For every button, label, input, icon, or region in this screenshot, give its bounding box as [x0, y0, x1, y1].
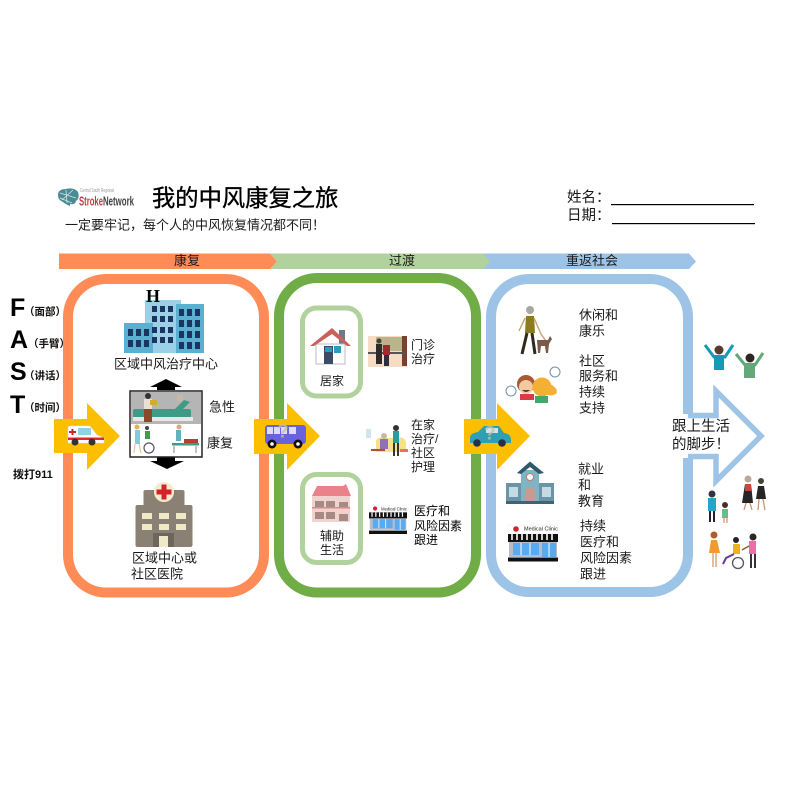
label: home care: 在家	[411, 417, 435, 432]
icon: car: ?	[484, 424, 496, 444]
label: medical and risk follow-up	[414, 504, 462, 547]
arrow: to community with car	[464, 403, 530, 470]
label: leisure and recreation	[579, 308, 618, 338]
band: 过渡	[270, 253, 490, 269]
call 911: 拨打911	[13, 467, 53, 481]
label: community services and support: 社区	[579, 354, 605, 368]
icon: medical clinic large: Medical Clinic	[524, 526, 558, 532]
label: continued medical and risk follow-up: 风险因素	[580, 550, 632, 566]
label: assisted living: 辅助	[320, 529, 344, 543]
label: outpatient	[411, 337, 435, 366]
icon: stroke centre building	[124, 286, 204, 353]
FAST mnemonic: （讲话）	[24, 369, 66, 382]
arrow: to hospital with ambulance	[54, 403, 120, 470]
icon: school	[506, 462, 554, 504]
label: outpatient: 门诊	[411, 337, 435, 352]
icon: brain	[58, 188, 79, 206]
band: 重返社会	[480, 253, 696, 269]
name and date fields: 姓名：	[567, 189, 610, 206]
image: acute and rehabilitation care	[130, 391, 202, 457]
label: home care: 社区	[411, 445, 435, 460]
FAST mnemonic: F	[10, 294, 25, 322]
logo: Stroke Network: Stroke	[79, 194, 103, 208]
label: medical and risk follow-up: 跟进	[414, 533, 438, 547]
icon: ambulance	[68, 426, 104, 446]
FAST mnemonic: （时间）	[24, 401, 66, 414]
icon: two people talking	[506, 367, 560, 403]
arrow: to transition with bus	[254, 403, 320, 470]
arrow: keep up with life	[660, 391, 761, 481]
icon: house	[310, 328, 351, 364]
panel: community reintegration outline	[491, 279, 688, 592]
image: home care	[366, 425, 408, 456]
arrow tail cover	[680, 398, 757, 474]
icon: wheelchair group	[709, 532, 756, 568]
FAST mnemonic: S	[10, 358, 27, 386]
arrow: up to stroke centre	[150, 379, 182, 390]
label: employment and education: 教育	[578, 494, 604, 508]
label: leisure and recreation: 康乐	[579, 324, 605, 338]
label: assisted living	[320, 529, 344, 557]
logo: Stroke Network: Central South Regional	[80, 188, 114, 194]
icon: stroke centre building: H	[146, 286, 160, 306]
label: community services and support: 服务和	[579, 368, 618, 384]
band: 康复: 康复	[174, 253, 200, 268]
FAST mnemonic: （面部）	[24, 305, 66, 318]
label: home care: 治疗/	[411, 432, 439, 446]
label: continued medical and risk follow-up: 跟进	[580, 566, 606, 582]
label: community services and support	[579, 354, 618, 416]
icon: community hospital	[136, 482, 192, 547]
label: stroke centre: 区域中风治疗中心	[114, 356, 218, 372]
image: outpatient	[368, 336, 407, 367]
icon: medical clinic small	[369, 506, 407, 534]
icon: medical clinic large	[508, 525, 558, 562]
logo: Stroke Network	[58, 188, 134, 208]
label: outpatient: 治疗	[411, 352, 435, 366]
label: employment and education: 就业	[578, 462, 604, 476]
label: medical and risk follow-up: 风险因素	[414, 518, 462, 533]
label: community services and support: 支持	[579, 400, 605, 416]
label: home: 居家	[320, 373, 344, 388]
name and date fields: 日期：	[567, 207, 610, 224]
icon: cheering people	[705, 345, 763, 378]
icon: assisted living building	[312, 484, 351, 522]
name and date fields	[567, 189, 755, 224]
icon: bus: ?	[277, 422, 289, 442]
panel: home	[302, 308, 360, 396]
label: medical and risk follow-up: 医疗和	[414, 504, 450, 518]
arrow: down to community hospital	[150, 457, 184, 469]
label: home care	[411, 417, 439, 474]
label: assisted living: 生活	[320, 543, 344, 557]
label: rehabilitation: 康复	[207, 436, 233, 450]
band: 康复	[59, 253, 277, 269]
icon: family walking	[708, 476, 766, 523]
band: 过渡: 过渡	[389, 253, 415, 268]
icon: dog walker	[519, 306, 552, 354]
icon: medical clinic small: Medical Clinic	[381, 506, 407, 511]
subtitle: 一定要牢记，每个人的中风恢复情况都不同！	[65, 218, 325, 232]
label: regional or community hospital: 社区医院	[131, 566, 183, 582]
label: employment and education	[578, 462, 604, 508]
arrow text: 跟上生活	[672, 418, 730, 435]
label: leisure and recreation: 休闲和	[579, 308, 618, 322]
label: home care: 护理	[411, 460, 435, 474]
title: 我的中风康复之旅	[152, 185, 338, 211]
arrow text: 的脚步！	[672, 436, 730, 453]
label: continued medical and risk follow-up: 医疗和	[580, 534, 619, 550]
FAST mnemonic: T	[10, 391, 25, 419]
label: employment and education: 和	[578, 478, 591, 492]
label: continued medical and risk follow-up	[580, 518, 632, 582]
panel: assisted living	[302, 474, 360, 562]
label: community services and support: 持续	[579, 384, 605, 400]
label: regional or community hospital	[131, 550, 197, 582]
panel: rehabilitation outline	[68, 279, 264, 592]
FAST mnemonic: （手臂）	[28, 337, 70, 350]
arrow text	[672, 418, 730, 453]
FAST mnemonic: A	[10, 326, 28, 354]
label: regional or community hospital: 区域中心或	[132, 550, 197, 566]
band: 重返社会: 重返社会	[566, 253, 618, 268]
logo: Stroke Network: Network	[103, 194, 134, 208]
panel: transition outline	[279, 278, 476, 592]
label: acute: 急性	[209, 400, 235, 414]
label: continued medical and risk follow-up: 持续	[580, 518, 606, 534]
FAST mnemonic	[10, 294, 70, 419]
